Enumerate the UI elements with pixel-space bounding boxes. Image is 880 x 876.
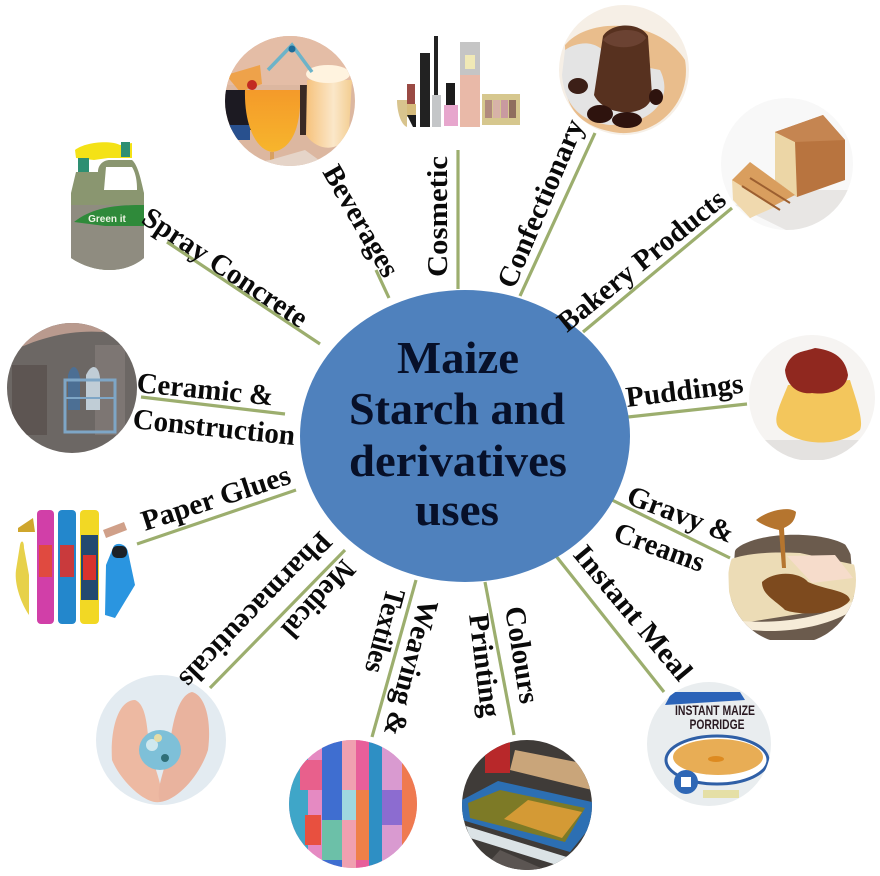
icon: bakery	[732, 115, 848, 230]
icon: textiles	[288, 738, 418, 873]
icon: screen printing	[462, 740, 592, 870]
central title: Starch and	[349, 383, 565, 434]
label: Gravy and Creams	[610, 480, 739, 579]
label: Spray Concrete: Spray Concrete	[136, 201, 314, 334]
label: Medical Pharmaceuticals: Pharmaceuticals	[173, 525, 338, 695]
central title: Maize	[397, 332, 519, 383]
product name: INSTANT MAIZE	[675, 702, 755, 718]
product name: PORRIDGE	[690, 716, 744, 732]
label: Ceramic and Construction: Ceramic &	[135, 367, 275, 412]
central title: uses	[415, 484, 499, 535]
icon: spray concrete bottle	[71, 142, 144, 270]
central title: derivatives	[349, 435, 567, 486]
icon: pudding	[745, 335, 880, 460]
label: Colours Printing: Printing	[462, 612, 507, 720]
icon: paper glues	[16, 510, 135, 624]
central title	[349, 332, 567, 535]
product name	[675, 702, 755, 732]
label: Beverages: Beverages	[316, 160, 406, 283]
central ellipse	[300, 290, 630, 582]
connector lines	[137, 133, 747, 737]
label: Paper Glues: Paper Glues	[137, 459, 295, 538]
label: Gravy and Creams: Gravy &	[622, 480, 739, 550]
label: Bakery Products: Bakery Products	[551, 183, 732, 338]
label: Ceramic and Construction: Construction	[131, 403, 297, 452]
icon: ceramic and construction	[5, 320, 140, 455]
label: Gravy and Creams: Creams	[610, 517, 709, 579]
label: Instant Meal: Instant Meal	[567, 539, 698, 687]
label: Ceramic and Construction	[131, 367, 297, 452]
label: Weaving and Textiles: Textiles	[358, 585, 411, 677]
icon: confectionary	[559, 5, 689, 135]
label: Puddings: Puddings	[624, 368, 745, 414]
icon: beverages	[225, 35, 356, 169]
label: Colours Printing	[462, 604, 545, 720]
label: Confectionary: Confectionary	[491, 114, 591, 293]
label: Cosmetic: Cosmetic	[422, 156, 454, 277]
label: Weaving and Textiles: Weaving &	[377, 596, 444, 740]
icon: gravy	[725, 509, 860, 645]
icon: medical hands	[95, 672, 227, 808]
bottle label: Green it	[88, 214, 127, 225]
label: Colours Printing: Colours	[498, 604, 545, 706]
icon: cosmetics	[397, 36, 520, 127]
icon: instant maize porridge	[645, 680, 775, 810]
label: Medical Pharmaceuticals: Medical	[275, 553, 362, 645]
